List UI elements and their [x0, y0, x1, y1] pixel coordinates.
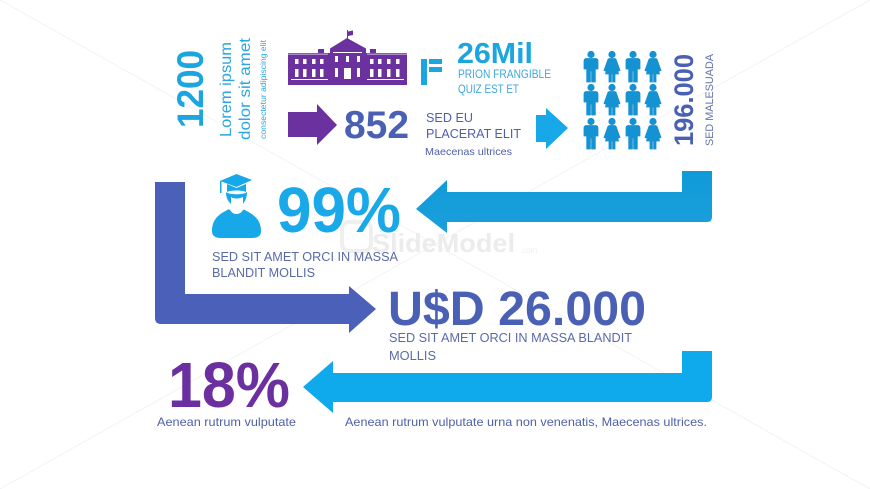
text: sed eu placerat elit: Maecenas ultrices [425, 146, 512, 158]
icon: graduate [212, 174, 261, 238]
text: sed sit amet 1 [212, 250, 399, 280]
caption: aenean left: Aenean rutrum vulputate [157, 415, 296, 429]
stat: USD 26.000: U$D 26.000 [388, 283, 646, 336]
vertical text: lorem ipsum: dolor sit amet [237, 37, 254, 140]
stat: 18%: 18% [168, 349, 290, 421]
stat: 99%: 99% [277, 174, 401, 246]
stat: 26Mil [457, 38, 551, 96]
watermark [342, 222, 538, 258]
stat: 852: 852 [344, 104, 409, 147]
text: sed sit amet 1: BLANDIT MOLLIS [212, 266, 315, 280]
stat: 196.000: 196.000 [669, 54, 699, 146]
icon: people grid [584, 51, 661, 149]
stat: 1200: 1200 [170, 50, 211, 128]
arrow: blue pointing left to 99% [416, 171, 712, 233]
text: sed sit amet 2: MOLLIS [389, 349, 436, 363]
text: sed sit amet 2: SED SIT AMET ORCI IN MASSA BLANDIT [389, 331, 632, 345]
vertical text: lorem ipsum: consectetur adipiscing elit [258, 39, 268, 139]
vertical text: lorem ipsum: Lorem ipsum [218, 42, 235, 137]
text: sed eu placerat elit: PLACERAT ELIT [426, 127, 521, 141]
text: sed eu placerat elit: SED EU [426, 111, 473, 125]
label: sed malesuada: SED MALESUADA [704, 53, 716, 146]
stat: 26Mil: 26Mil [457, 38, 533, 70]
watermark: .com [520, 246, 538, 255]
text: sed sit amet 2 [389, 331, 632, 363]
caption: aenean right: Aenean rutrum vulputate urna non venenatis, Maecenas ultrices. [345, 415, 707, 429]
icon: government building [288, 30, 407, 85]
vertical text: lorem ipsum [218, 37, 268, 140]
stat: 26Mil: PRION FRANGIBLE [458, 67, 551, 81]
icon: bars logo [421, 59, 442, 85]
arrow: cyan pointing left to 18% [303, 351, 712, 413]
arrow: purple [288, 104, 337, 145]
watermark: SlideModel [372, 228, 515, 258]
stat: 26Mil: QUIZ EST ET [458, 82, 520, 96]
text: sed eu placerat elit [425, 111, 521, 158]
arrow: cyan small [536, 108, 568, 149]
arrow: indigo L-shape [155, 182, 376, 333]
text: sed sit amet 1: SED SIT AMET ORCI IN MASSA [212, 250, 399, 264]
